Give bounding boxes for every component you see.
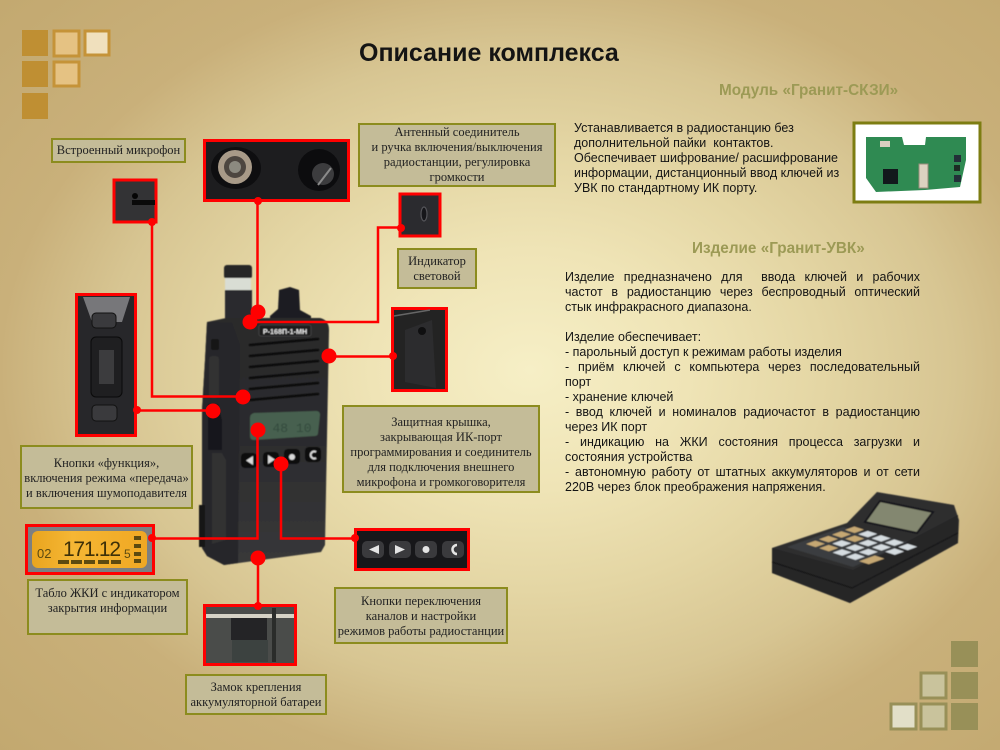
text: device description: - ввод ключей и номиналов радиочастот в радиостанцию <box>565 405 920 419</box>
label: protective cover: программирования и соединитель <box>350 445 532 459</box>
side buttons <box>199 339 226 547</box>
label: light indicator <box>397 248 477 289</box>
decorative squares: bottom right <box>891 641 978 730</box>
label: battery lock: Замок крепления <box>211 680 301 694</box>
radio buttons <box>241 447 321 468</box>
text: device description: - автономную работу от штатных аккумуляторов и от сети <box>565 465 920 479</box>
label: function buttons: Кнопки «функция», <box>54 456 159 470</box>
text: module description: УВК по стандартному ИК порту. <box>574 181 757 195</box>
photo: protective cover <box>392 308 446 390</box>
label: protective cover: закрывающая ИК-порт <box>380 430 502 444</box>
photo: LCD panel <box>26 526 154 574</box>
label: LCD panel: закрытия информации <box>48 601 167 615</box>
label: LCD panel <box>27 579 188 635</box>
label: built-in microphone: Встроенный микрофон <box>57 143 180 157</box>
label: battery lock: аккумуляторной батареи <box>190 695 322 709</box>
text: device description: - индикацию на ЖКИ состояния процесса загрузки и <box>565 435 920 449</box>
label: protective cover <box>342 405 540 493</box>
radio display: 48 10 <box>272 421 312 436</box>
label: antenna connector: громкости <box>430 170 484 184</box>
text: module description: дополнительной пайки контактов. <box>574 136 773 150</box>
label: light indicator: световой <box>413 269 461 283</box>
label: built-in microphone <box>51 138 186 163</box>
label: antenna connector: и ручка включения/выключения <box>372 140 542 154</box>
label: channel buttons: Кнопки переключения <box>361 594 481 608</box>
photo: built-in microphone <box>114 180 156 222</box>
connector: LCD panel <box>148 422 266 542</box>
radio photo <box>199 265 329 565</box>
device photo: Granit-UVK terminal <box>772 492 959 603</box>
photo: antenna connector and knob <box>204 140 348 200</box>
text: device description: - приём ключей с компьютера через последовательный <box>565 360 920 374</box>
connector: battery lock <box>250 550 266 610</box>
label: protective cover: Защитная крышка, <box>391 415 491 429</box>
model plate <box>259 325 311 336</box>
label: light indicator: Индикатор <box>408 254 466 268</box>
label: function buttons: и включения шумоподавителя <box>26 486 187 500</box>
label: channel buttons: каналов и настройки <box>366 609 476 623</box>
text: device description <box>565 270 920 494</box>
text: device description: через ИК порт <box>565 420 647 434</box>
photo: channel buttons <box>356 530 468 570</box>
model plate: Р-168П-1-МН <box>263 327 307 336</box>
photo: battery lock <box>204 606 296 664</box>
photo: LCD panel: 5 <box>124 547 131 561</box>
connector: antenna <box>250 197 266 320</box>
radio display <box>250 411 320 440</box>
connector: side buttons <box>133 404 220 418</box>
speaker slots <box>250 339 318 400</box>
text: device description: 220В через блок преображения напряжения. <box>565 480 826 494</box>
label: function buttons <box>20 445 193 509</box>
radio body <box>202 318 329 565</box>
photo: LCD panel: 02 <box>37 546 51 561</box>
connector: light indicator <box>242 224 405 330</box>
label: antenna connector <box>358 123 556 187</box>
heading: device: Изделие «Гранит-УВК» <box>692 240 865 257</box>
label: function buttons: включения режима «передача» <box>24 471 189 485</box>
label: channel buttons <box>334 587 508 644</box>
text: module description: Устанавливается в радиостанцию без <box>574 121 794 135</box>
text: device description: стык инфракрасного диапазона. <box>565 300 752 314</box>
photo: LCD panel: 171.12 <box>63 538 121 561</box>
text: device description: - хранение ключей <box>565 390 673 404</box>
knob <box>270 287 311 322</box>
label: channel buttons: режимов работы радиостанции <box>338 624 504 638</box>
text: device description: порт <box>565 375 591 389</box>
connector: microphone <box>148 218 250 404</box>
text: device description: Изделие обеспечивает: <box>565 330 701 344</box>
heading: module: Модуль «Гранит-СКЗИ» <box>719 82 898 99</box>
connector: protective cover <box>322 348 397 364</box>
label: protective cover: для подключения внешнего <box>368 460 514 474</box>
antenna <box>224 265 252 326</box>
text: device description: состояния устройства <box>565 450 692 464</box>
label: battery lock <box>185 674 327 715</box>
text: device description: - парольный доступ к режимам работы изделия <box>565 345 842 359</box>
text: device description: частот в радиостанцию через беспроводный оптический <box>565 285 920 299</box>
label: antenna connector: Антенный соединитель <box>394 125 520 139</box>
text: module description: Обеспечивает шифрование/ расшифрование <box>574 151 838 165</box>
decorative squares: top left <box>22 30 109 119</box>
title: Описание комплекса <box>359 39 619 67</box>
label: LCD panel: Табло ЖКИ с индикатором <box>35 586 180 600</box>
text: module description: информации, дистанционный ввод ключей из <box>574 166 839 180</box>
label: antenna connector: радиостанции, регулировка <box>384 155 530 169</box>
text: device description: Изделие предназначено для ввода ключей и рабочих <box>565 270 920 284</box>
label: protective cover: микрофона и громкоговорителя <box>357 475 525 489</box>
text: module description <box>574 121 839 195</box>
photo: module circuit board <box>854 123 980 202</box>
photo: light indicator <box>400 194 440 236</box>
photo: side buttons <box>76 294 136 436</box>
connector: channel buttons <box>274 456 359 542</box>
